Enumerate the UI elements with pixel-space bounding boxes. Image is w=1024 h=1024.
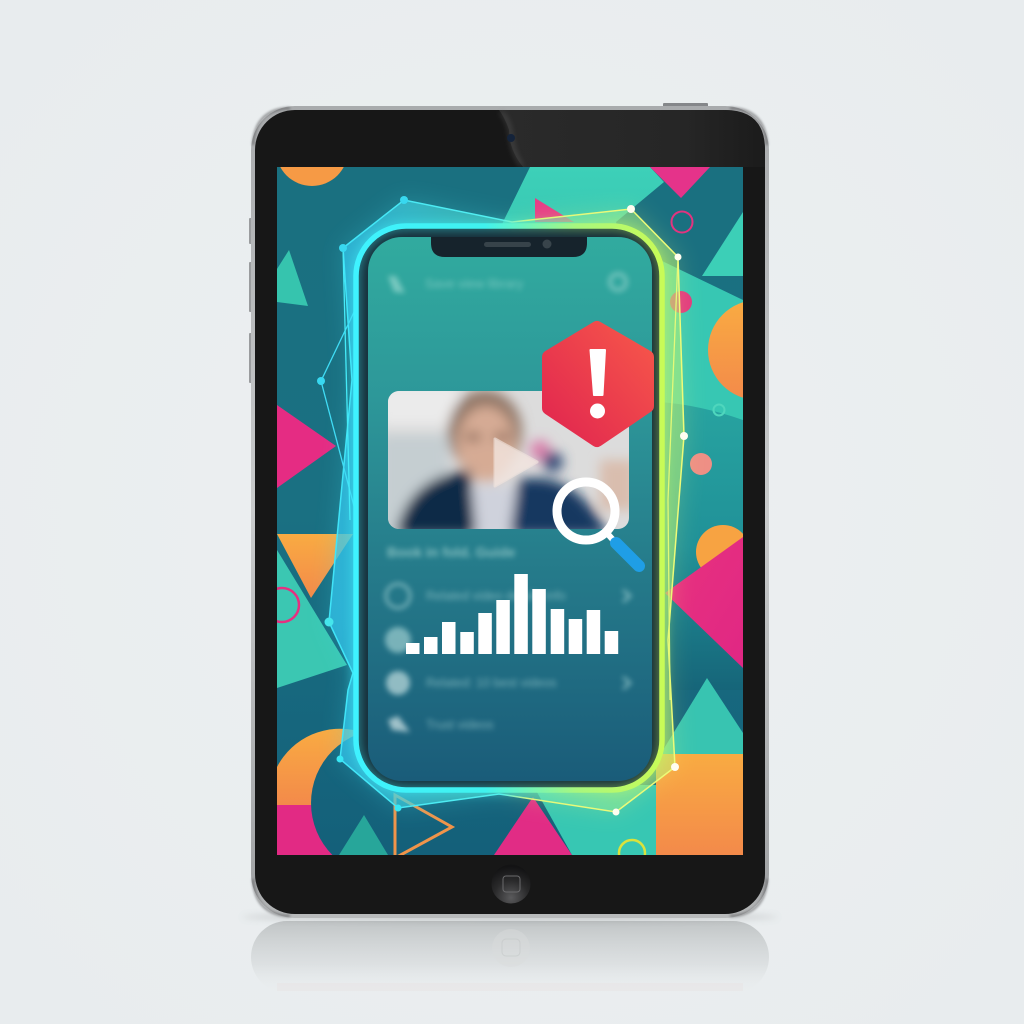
shape: large pink triangle right — [665, 537, 743, 668]
network nodes — [317, 196, 688, 816]
shape: pink ring left — [277, 586, 300, 624]
shape: right teal field — [660, 260, 743, 430]
shape: top right teal triangle — [702, 212, 743, 276]
shape: bottom pink block — [277, 805, 332, 855]
network fill — [329, 200, 684, 812]
blurred app header — [388, 274, 626, 293]
shape: salmon dot — [690, 453, 712, 475]
shape: bottom teal triangle — [339, 815, 388, 855]
magnifying glass icon — [557, 482, 639, 566]
bar chart — [406, 574, 618, 654]
tablet shadow — [242, 913, 778, 921]
shape: orange circle lower right — [696, 525, 743, 568]
shape: dark circle — [311, 736, 411, 855]
home button — [492, 864, 530, 904]
shape: pink ring — [672, 212, 692, 232]
shape: right lower teal fade — [665, 402, 743, 648]
video thumbnail — [388, 391, 629, 529]
shape: bottom pink triangle — [494, 797, 572, 855]
play icon — [495, 439, 537, 486]
front camera — [507, 134, 515, 142]
tablet metal frame — [251, 106, 769, 918]
shape: teal triangle lower right — [660, 678, 743, 755]
shape: yellow ring — [618, 838, 646, 855]
network lines — [329, 200, 684, 812]
phone notch — [431, 237, 587, 257]
shape: orange circle right — [708, 302, 743, 398]
phone neon frame — [356, 226, 662, 790]
tablet black bezel — [255, 110, 765, 914]
floor reflection of tablet — [251, 921, 769, 993]
blurred section heading: Book in fold. Guide — [387, 544, 516, 560]
shape: orange square — [656, 754, 743, 855]
bezel reflection edge highlight — [501, 112, 522, 166]
shape: lower left teal triangle — [277, 550, 347, 688]
blurred person photo — [388, 391, 629, 529]
shape: bottom orange arc — [277, 728, 354, 805]
shape: small pink triangle — [535, 198, 574, 222]
bezel top reflection — [499, 110, 765, 167]
shape: small teal ring — [714, 404, 724, 416]
tablet screen wallpaper — [277, 167, 743, 855]
alert hexagon icon — [549, 328, 647, 440]
neon polygon network — [317, 196, 688, 816]
network spurs — [321, 248, 678, 700]
shape: pink dot — [670, 291, 692, 313]
blurred app header: Save view library — [425, 276, 524, 291]
shape: bottom teal field — [533, 785, 656, 855]
network glow — [329, 200, 684, 812]
blurred list rows — [385, 584, 630, 732]
blurred list rows: Related video details info — [426, 589, 566, 603]
shape: left pink triangle — [277, 405, 336, 488]
side buttons — [249, 103, 708, 383]
shape: teal triangle left — [277, 250, 308, 306]
tablet device — [249, 103, 769, 918]
shape: orange outline triangle — [395, 795, 452, 858]
phone bezel — [358, 228, 660, 788]
phone display — [368, 237, 652, 781]
phone neon frame glow — [356, 226, 662, 790]
shape: orange inverted triangle — [277, 534, 353, 598]
tablet frame corner shading — [253, 108, 767, 916]
shape: top teal polygon — [502, 167, 664, 224]
smartphone — [356, 226, 662, 790]
shape: top orange semicircle — [280, 167, 344, 186]
blurred list rows: Related: 10 best videos — [426, 676, 557, 690]
blurred list rows: Trust videos — [426, 718, 494, 732]
shape: top pink triangle — [650, 167, 710, 198]
